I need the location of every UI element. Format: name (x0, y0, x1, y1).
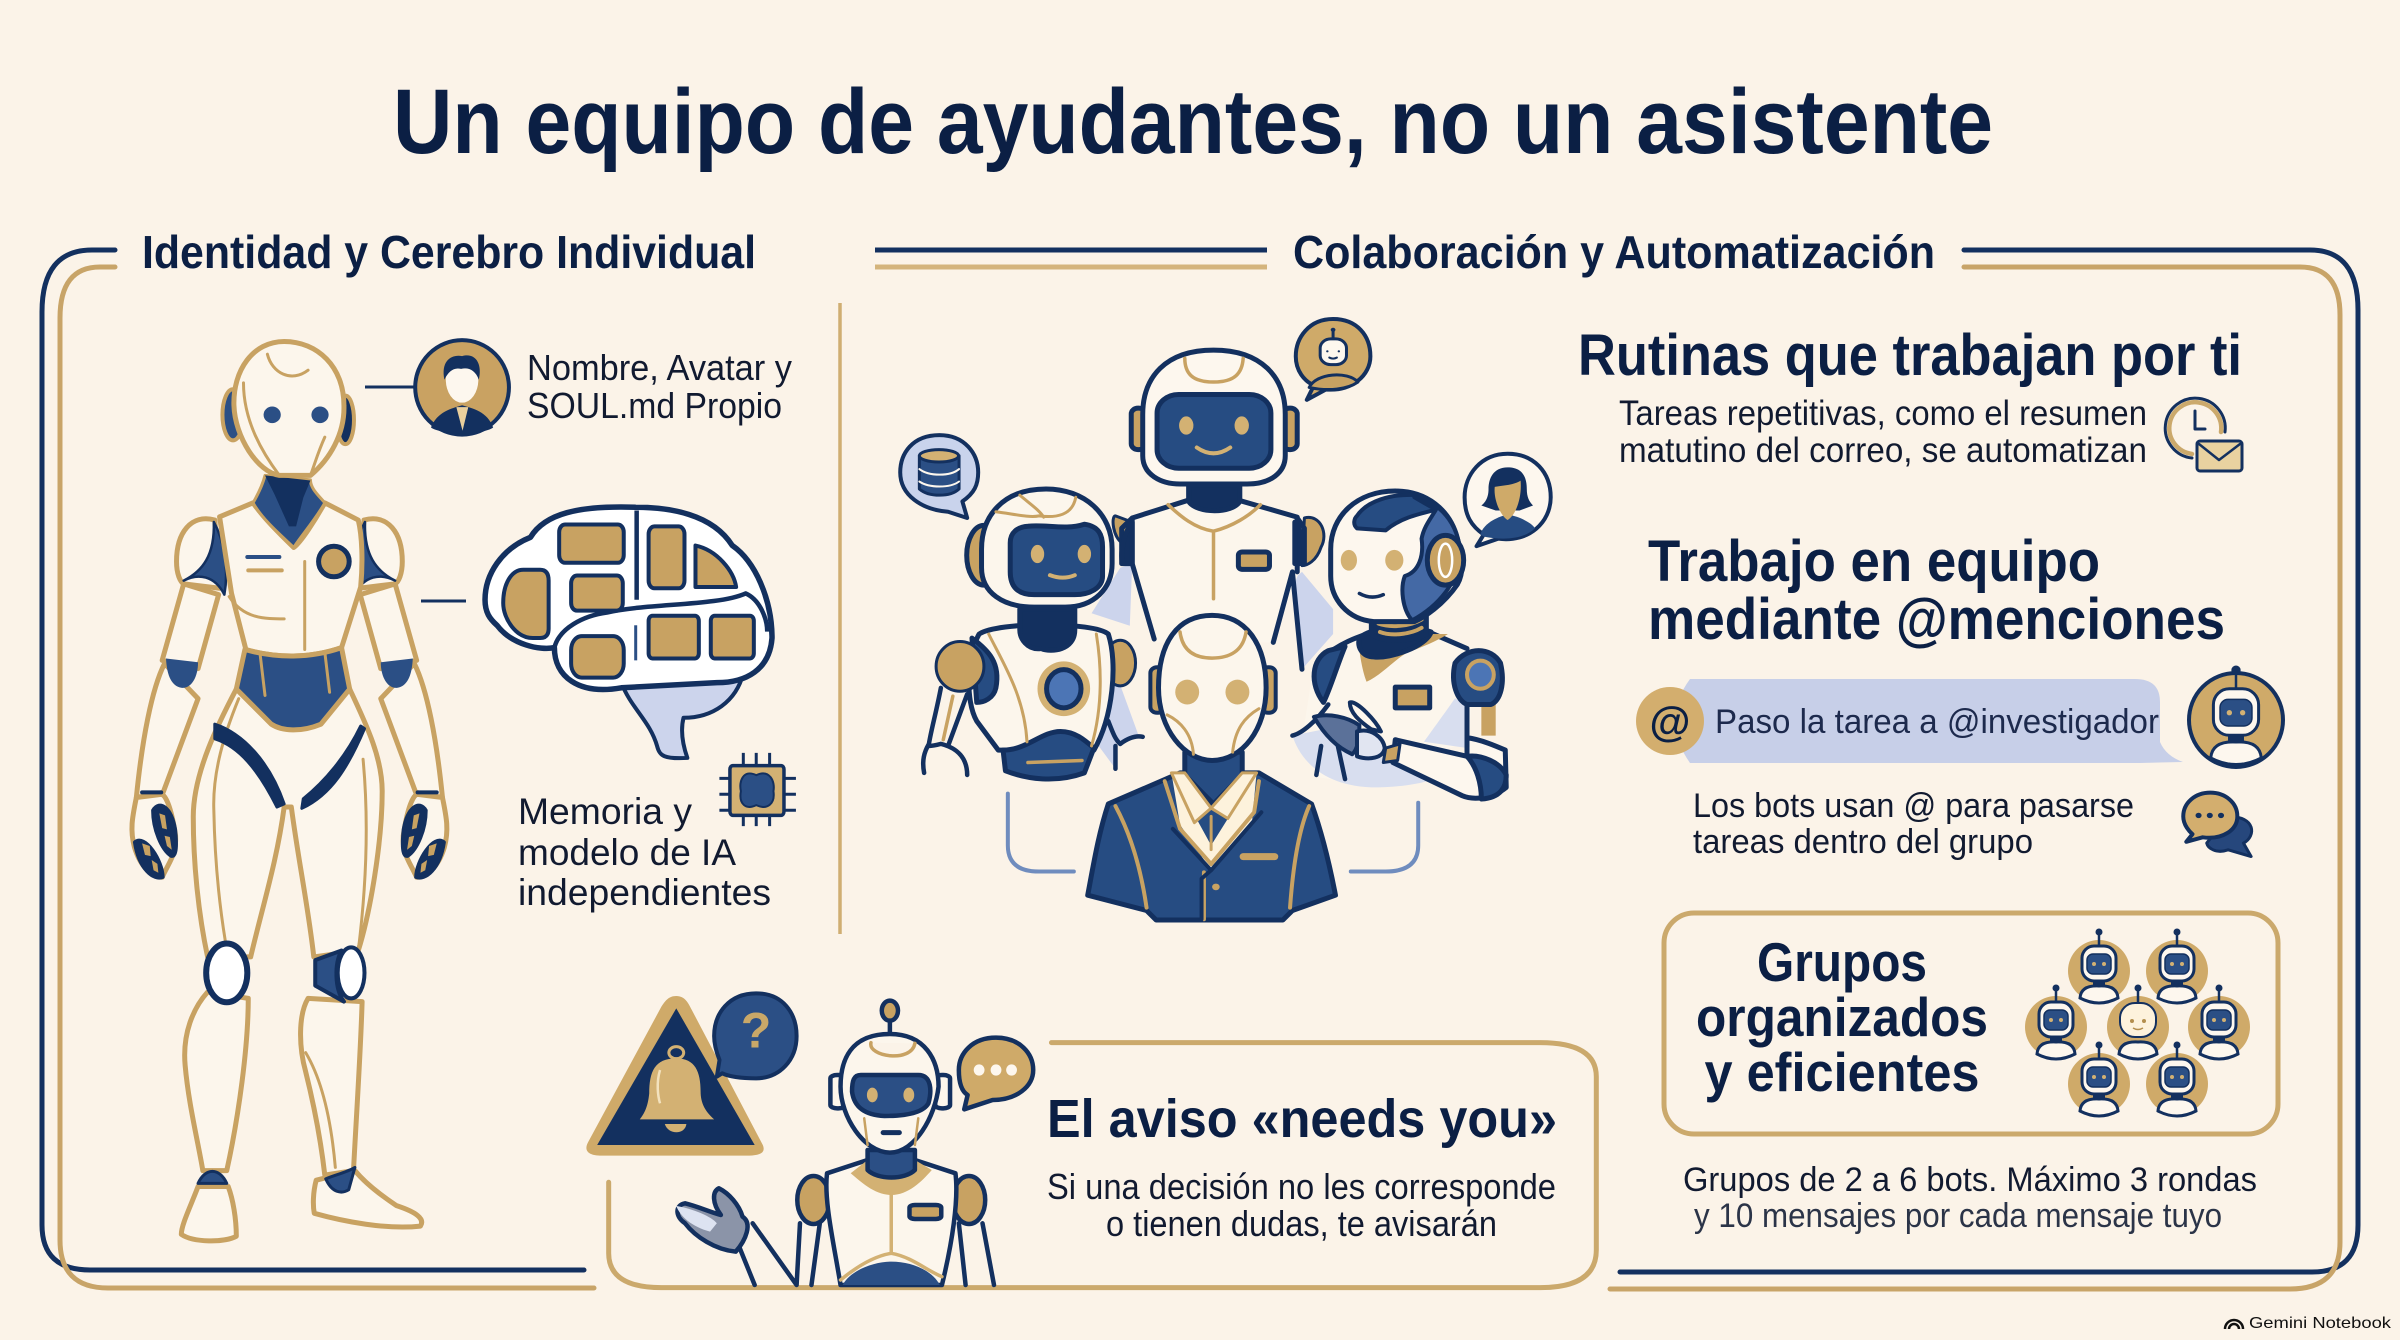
icon: warning bell (586, 993, 797, 1156)
bubble: woman (1465, 454, 1551, 546)
label: memory and model: independientes (518, 872, 771, 913)
icon: clock and envelope (2165, 398, 2242, 471)
text: mentions explanation: Los bots usan @ para pasarse (1693, 787, 2134, 825)
heading: groups: Grupos (1757, 931, 1927, 993)
torso (220, 503, 362, 656)
label: avatar: Nombre, Avatar y (527, 347, 792, 388)
heading: teamwork (1648, 529, 2225, 652)
frame: left panel double border (42, 250, 594, 1288)
block: routines: matutino del correo, se automatizan (1619, 431, 2147, 470)
heading: teamwork: Trabajo en equipo (1648, 529, 2100, 594)
text: group limits (1683, 1161, 2257, 1235)
right arm (353, 519, 447, 878)
heading: groups (1696, 931, 1988, 1103)
robot: notice (676, 1001, 1033, 1285)
bubble: bot (1296, 319, 1370, 400)
block: routines (1578, 323, 2242, 470)
frame: right panel double border (1610, 250, 2358, 1289)
hip bands (215, 724, 284, 807)
icon: chip (719, 753, 796, 826)
text: mentions explanation: tareas dentro del grupo (1693, 823, 2033, 861)
label: avatar: SOUL.md Propio (527, 385, 782, 426)
figure: full body humanoid robot (132, 341, 447, 1241)
left arm (132, 519, 226, 878)
heading: right panel: Colaboración y Automatización (1293, 226, 1935, 278)
text: notice: El aviso «needs you» (1047, 1089, 1557, 1149)
heading: groups: y eficientes (1704, 1041, 1980, 1103)
bracket lines (1008, 794, 1418, 872)
connector: brain (421, 600, 466, 602)
front robot (1088, 615, 1335, 920)
watermark: Gemini Notebook (2249, 1315, 2392, 1332)
waist belt (236, 648, 350, 730)
title: Un equipo de ayudantes, no un asistente (393, 71, 1993, 173)
block: routines: Tareas repetitivas, como el resumen (1619, 394, 2147, 433)
text: notice (1047, 1089, 1557, 1244)
knees (206, 944, 247, 1002)
chat bubble: mention: Paso la tarea a @investigador (1715, 703, 2159, 741)
text: group limits: Grupos de 2 a 6 bots. Máximo 3 rondas (1683, 1161, 2257, 1199)
label: memory and model (518, 791, 771, 913)
text: mentions explanation (1693, 787, 2134, 861)
block: routines: Rutinas que trabajan por ti (1578, 323, 2242, 388)
panel: notice box (609, 1043, 1596, 1288)
back robot (1092, 350, 1333, 669)
heading: groups: organizados (1696, 986, 1988, 1048)
heading: teamwork: mediante @menciones (1648, 587, 2225, 652)
text: group limits: y 10 mensajes por cada mensaje tuyo (1694, 1197, 2222, 1235)
connector: avatar (365, 386, 416, 388)
text: notice: o tienen dudas, te avisarán (1106, 1203, 1497, 1244)
frame: top middle rule (875, 250, 1267, 267)
label: memory and model: Memoria y (518, 791, 692, 832)
icon: chat bubbles (2183, 793, 2252, 857)
legs (181, 689, 422, 1241)
text: notice: Si una decisión no les corresponde (1047, 1166, 1556, 1207)
illustration: robot team (900, 319, 1551, 920)
left robot (923, 489, 1143, 779)
right robot (1292, 491, 1506, 799)
heading: left panel: Identidad y Cerebro Individual (142, 226, 756, 278)
divider (838, 303, 842, 934)
icon: warning bell: ? (741, 1002, 771, 1058)
label: memory and model: modelo de IA (518, 832, 736, 873)
panel: groups (1664, 913, 2278, 1134)
icon: avatar (415, 340, 509, 435)
icon: bot avatar (2189, 665, 2283, 767)
head (222, 389, 243, 440)
chat bubble: mention: @ (1650, 698, 1690, 745)
label: avatar (527, 347, 792, 426)
bubble: database (900, 435, 978, 518)
icon: brain (485, 507, 772, 758)
icon group: bots (2025, 928, 2250, 1116)
chat bubble: mention (1636, 679, 2183, 763)
